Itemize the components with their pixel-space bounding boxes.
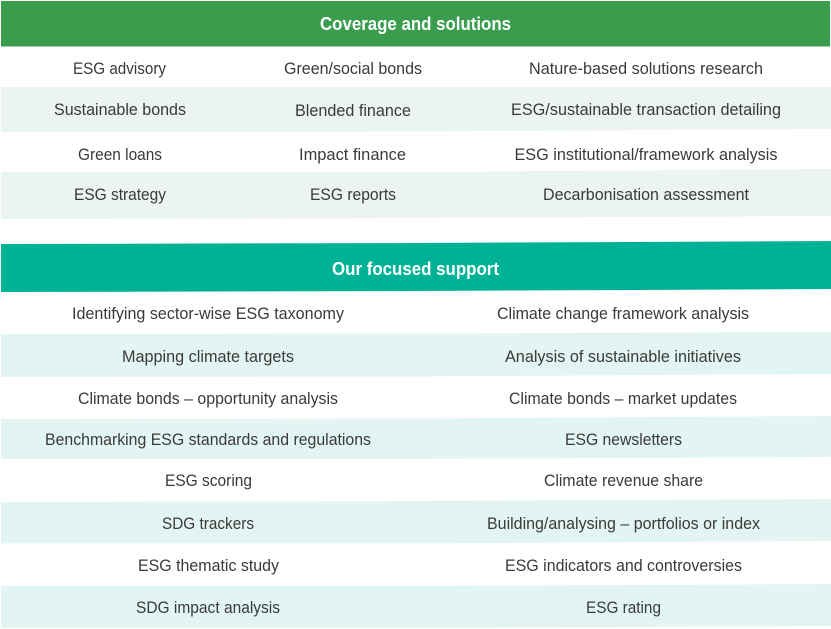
row 2 xyxy=(1,332,831,377)
row 2: Analysis of sustainable initiatives xyxy=(505,348,741,366)
row 4: Decarbonisation assessment xyxy=(543,186,749,204)
row 6: SDG trackers xyxy=(162,515,254,533)
heading: our focused support xyxy=(1,241,831,292)
row 4 xyxy=(1,169,831,219)
row 8: ESG rating xyxy=(586,599,661,617)
row 3: Impact finance xyxy=(299,146,406,164)
row 4: ESG reports xyxy=(310,186,396,204)
row 1: Identifying sector-wise ESG taxonomy xyxy=(72,305,345,323)
row 1 xyxy=(72,305,749,323)
row 3: ESG institutional/framework analysis xyxy=(514,146,778,164)
row 4 xyxy=(1,416,831,459)
row 3: Climate bonds – opportunity analysis xyxy=(78,390,338,408)
row 1: ESG advisory xyxy=(73,60,167,78)
row 1: Climate change framework analysis xyxy=(497,305,749,323)
row 3 xyxy=(78,390,737,408)
row 4: ESG strategy xyxy=(74,186,167,204)
row 7: ESG thematic study xyxy=(138,557,280,575)
row 6 xyxy=(1,499,831,544)
heading: coverage and solutions xyxy=(1,1,830,46)
row 4: Benchmarking ESG standards and regulations xyxy=(45,431,371,449)
panel: our focused support xyxy=(1,241,831,628)
heading: coverage and solutions: Coverage and solutions xyxy=(320,14,511,34)
row 2 xyxy=(1,87,831,132)
row 4: ESG newsletters xyxy=(565,431,682,449)
heading: our focused support: Our focused support xyxy=(332,259,499,279)
row 2: Sustainable bonds xyxy=(54,101,186,119)
row 5: ESG scoring xyxy=(165,472,252,490)
row 1: Green/social bonds xyxy=(284,60,422,78)
row 2: Blended finance xyxy=(295,102,411,120)
row 3 xyxy=(78,146,778,164)
row 1 xyxy=(73,60,763,78)
row 5: Climate revenue share xyxy=(544,472,703,490)
row 8 xyxy=(1,584,831,628)
row 8: SDG impact analysis xyxy=(136,599,280,617)
row 7: ESG indicators and controversies xyxy=(505,557,742,575)
panel: coverage and solutions xyxy=(1,1,831,219)
row 2: Mapping climate targets xyxy=(122,348,294,366)
row 7 xyxy=(138,557,742,575)
row 3: Green loans xyxy=(78,146,162,164)
row 2: ESG/sustainable transaction detailing xyxy=(511,101,781,119)
row 6: Building/analysing – portfolios or index xyxy=(487,515,761,533)
row 1: Nature-based solutions research xyxy=(529,60,763,78)
row 5 xyxy=(165,472,703,490)
row 3: Climate bonds – market updates xyxy=(509,390,737,408)
